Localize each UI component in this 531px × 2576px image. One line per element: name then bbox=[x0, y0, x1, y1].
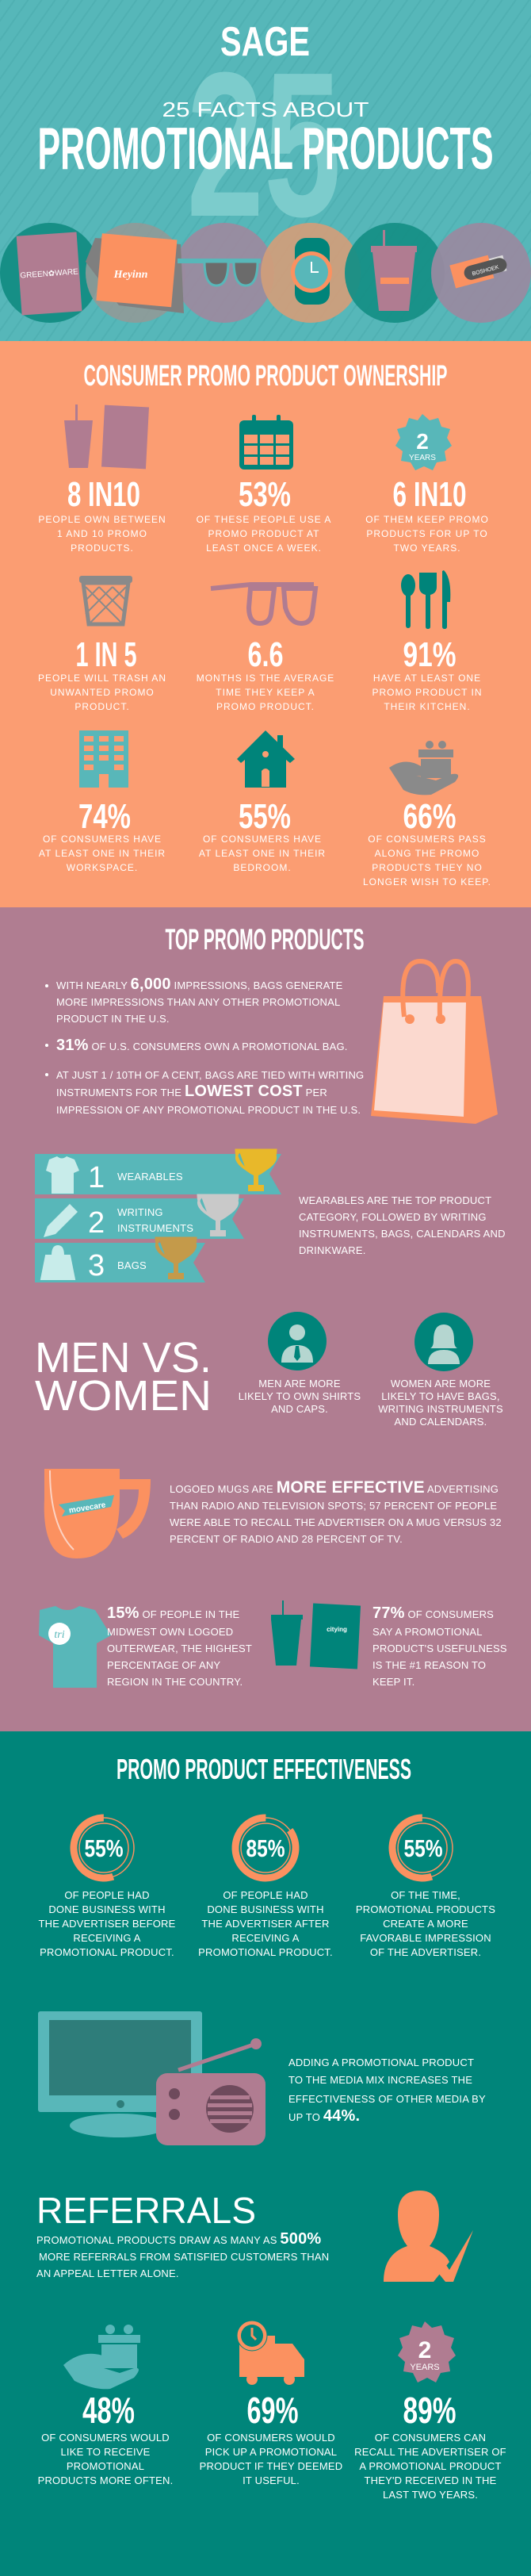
ribbon ranking bbox=[35, 1150, 281, 1282]
icon: usb drive: BOSHOEK bbox=[472, 265, 500, 277]
product circles bbox=[0, 223, 531, 323]
header panel bbox=[0, 0, 531, 341]
stat: 74%: OF CONSUMERS HAVE bbox=[43, 834, 162, 845]
icon: messenger bag: Heyinn bbox=[113, 269, 148, 281]
text: 77% usefulness: IS THE #1 REASON TO bbox=[372, 1659, 486, 1671]
text: 15% midwest: 15% bbox=[107, 1604, 139, 1622]
subtitle: 25 FACTS ABOUT bbox=[162, 98, 369, 121]
text: media mix 44%: ADDING A PROMOTIONAL PRODUCT bbox=[288, 2057, 474, 2068]
donut: 55% before bbox=[38, 1810, 176, 1958]
stat: 48%: LIKE TO RECEIVE bbox=[60, 2446, 151, 2458]
icon: t-shirt bbox=[39, 1606, 111, 1688]
stat: 91%: THEIR KITCHEN. bbox=[384, 701, 471, 712]
text: 15% midwest: OF PEOPLE IN THE bbox=[139, 1608, 239, 1620]
text: mugs more effective: LOGOED MUGS ARE bbox=[170, 1483, 277, 1495]
donut: 55% favorable: 55% bbox=[404, 1834, 442, 1862]
donut: 55% before: OF PEOPLE HAD bbox=[64, 1889, 150, 1901]
bullet list: AT JUST 1 / 10TH OF A CENT, BAGS ARE TIED WITH WRITING bbox=[56, 1069, 364, 1081]
panel: promo product effectiveness bbox=[0, 1731, 531, 2576]
bullet list: 6,000 IMPRESSIONS, BAGS GENERATE bbox=[131, 976, 343, 993]
text: men: MEN ARE MORE bbox=[258, 1378, 341, 1390]
stat: 6 in 10 bbox=[365, 414, 489, 554]
icon: watch bbox=[291, 238, 332, 305]
stat: 89%: OF CONSUMERS CAN bbox=[375, 2432, 486, 2444]
text: wearables top category: CATEGORY, FOLLOWED BY WRITING bbox=[299, 1211, 487, 1223]
icon: tv and radio bbox=[38, 2011, 266, 2145]
text: 77% usefulness: PRODUCT'S USEFULNESS bbox=[372, 1643, 507, 1654]
stat: 66% bbox=[363, 741, 491, 887]
bullet list: WITH NEARLY bbox=[56, 979, 131, 991]
ribbon 2: writing instruments: WRITING bbox=[117, 1206, 163, 1218]
text: wearables top category: DRINKWARE. bbox=[299, 1244, 366, 1256]
stat: 1 in 5: UNWANTED PROMO bbox=[50, 687, 155, 698]
icon: person with check bbox=[384, 2191, 473, 2282]
stat: 89%: LAST TWO YEARS. bbox=[383, 2489, 478, 2501]
stat: 6 in 10: 6 IN10 bbox=[393, 475, 466, 514]
stat: 48%: PRODUCTS MORE OFTEN. bbox=[38, 2474, 173, 2486]
stat: 53% bbox=[197, 415, 331, 554]
stat: 66%: OF CONSUMERS PASS bbox=[368, 834, 487, 845]
text: mugs more effective: MORE EFFECTIVE ADVERTISING bbox=[277, 1478, 499, 1497]
bullet list: MORE IMPRESSIONS THAN ANY OTHER PROMOTIONAL bbox=[56, 996, 340, 1008]
donut: 85% after: THE ADVERTISER AFTER bbox=[201, 1918, 330, 1930]
donut: 55% before: THE ADVERTISER BEFORE bbox=[38, 1918, 176, 1930]
ribbon 1: wearables: 1 bbox=[88, 1161, 105, 1194]
stat: 48%: 48% bbox=[82, 2390, 135, 2431]
stat: 8 in 10: 8 IN10 bbox=[67, 475, 140, 514]
bullet list: INSTRUMENTS FOR THE bbox=[56, 1087, 185, 1098]
donut: 55% favorable: PROMOTIONAL PRODUCTS bbox=[356, 1903, 495, 1915]
ribbon 3: bags bbox=[35, 1238, 205, 1282]
bullet list bbox=[45, 976, 364, 1116]
icon: sunglasses bbox=[178, 259, 261, 286]
stat: 48%: PROMOTIONAL bbox=[67, 2460, 144, 2472]
ribbon 2: writing instruments: INSTRUMENTS bbox=[117, 1222, 193, 1234]
icon: woman bbox=[414, 1313, 473, 1371]
stat: 8 in 10: PEOPLE OWN BETWEEN bbox=[38, 514, 166, 525]
stat: 91%: HAVE AT LEAST ONE bbox=[373, 673, 481, 684]
icon: messenger bag bbox=[86, 233, 184, 313]
stat: 89%: RECALL THE ADVERTISER OF bbox=[354, 2446, 506, 2458]
text: men: AND CAPS. bbox=[271, 1403, 328, 1415]
icon: notebook bbox=[17, 232, 82, 316]
text: media mix 44%: 44%. bbox=[323, 2107, 360, 2125]
icon: usb drive bbox=[449, 251, 510, 289]
stat: 66%: ALONG THE PROMO bbox=[375, 848, 479, 859]
text: 77% usefulness: OF CONSUMERS bbox=[405, 1608, 494, 1620]
text: referrals 500%: AN APPEAL LETTER ALONE. bbox=[36, 2267, 179, 2279]
icon: man bbox=[268, 1312, 327, 1370]
panel: consumer promo product ownership bbox=[0, 341, 531, 907]
stat: 8 in 10 bbox=[38, 404, 166, 554]
stat: 1 in 5: 1 IN 5 bbox=[76, 635, 136, 674]
text: 15% midwest: PERCENTAGE OF ANY bbox=[107, 1659, 220, 1671]
stat: 48%: OF CONSUMERS WOULD bbox=[41, 2432, 170, 2444]
text: referrals 500%: PROMOTIONAL PRODUCTS DRAW AS MANY AS bbox=[36, 2234, 280, 2246]
stat: 48% bbox=[38, 2325, 173, 2486]
stat: 8 in 10: 1 AND 10 PROMO bbox=[57, 528, 147, 539]
icon: shopping bag bbox=[371, 961, 498, 1124]
text: women: WOMEN ARE MORE bbox=[391, 1378, 491, 1390]
icon: tumbler and notebook bbox=[271, 1600, 361, 1669]
stat: 8 in 10: PRODUCTS. bbox=[71, 542, 134, 554]
text: mugs more effective: THAN RADIO AND TELEVISION SPOTS; 57 PERCENT OF PEOPLE bbox=[170, 1500, 497, 1512]
stat: 6.6: MONTHS IS THE AVERAGE bbox=[197, 673, 334, 684]
ribbon 2: writing instruments bbox=[35, 1195, 244, 1240]
stat: 6.6 bbox=[197, 585, 334, 712]
heading: men vs women: WOMEN bbox=[35, 1372, 212, 1420]
text: 77% usefulness: SAY A PROMOTIONAL bbox=[372, 1626, 483, 1638]
bullet list: LOWEST COST PER bbox=[185, 1083, 327, 1100]
stat: 1 in 5: PRODUCT. bbox=[74, 701, 130, 712]
stat: 53%: OF THESE PEOPLE USE A bbox=[197, 514, 331, 525]
bullet list: OF U.S. CONSUMERS OWN A PROMOTIONAL BAG. bbox=[89, 1041, 348, 1052]
ribbon 3: bags: 3 bbox=[88, 1249, 105, 1282]
text: 15% midwest: REGION IN THE COUNTRY. bbox=[107, 1676, 243, 1688]
stat: 91%: 91% bbox=[403, 635, 457, 674]
stat: 89% bbox=[354, 2321, 506, 2501]
donut: 85% after bbox=[198, 1806, 333, 1958]
stat: 6 in 10: PRODUCTS FOR UP TO bbox=[366, 528, 488, 539]
donut: 55% favorable: OF THE TIME, bbox=[391, 1889, 460, 1901]
donut: 55% favorable: FAVORABLE IMPRESSION bbox=[360, 1932, 491, 1944]
ribbon 2: writing instruments: 2 bbox=[88, 1206, 105, 1240]
text: women: LIKELY TO HAVE BAGS, bbox=[381, 1390, 500, 1402]
stat: 69%: PICK UP A PROMOTIONAL bbox=[205, 2446, 337, 2458]
stat: 6 in 10: YEARS bbox=[409, 454, 436, 462]
text: women: WRITING INSTRUMENTS bbox=[378, 1403, 503, 1415]
donut: 55% before: DONE BUSINESS WITH bbox=[48, 1903, 166, 1915]
ribbon 1: wearables: WEARABLES bbox=[117, 1171, 183, 1183]
text: women: AND CALENDARS. bbox=[395, 1416, 487, 1428]
stat: 6 in 10: TWO YEARS. bbox=[393, 542, 461, 554]
text: media mix 44%: UP TO bbox=[288, 2111, 323, 2123]
stat: 89%: 2 bbox=[418, 2337, 431, 2363]
stat: 69%: IT USEFUL. bbox=[243, 2474, 300, 2486]
stat: 69%: PRODUCT IF THEY DEEMED bbox=[200, 2460, 342, 2472]
donut: 85% after: PROMOTIONAL PRODUCT. bbox=[198, 1946, 333, 1958]
text: mugs more effective: WERE ABLE TO RECALL THE ADVERTISER ON A MUG VERSUS 32 bbox=[170, 1516, 502, 1528]
heading: referrals: REFERRALS bbox=[36, 2190, 256, 2231]
stat: 89%: 89% bbox=[403, 2390, 457, 2431]
stat: 1 in 5: PEOPLE WILL TRASH AN bbox=[38, 673, 166, 684]
stat: 69%: OF CONSUMERS WOULD bbox=[207, 2432, 335, 2444]
stat: 66%: LONGER WISH TO KEEP. bbox=[363, 876, 491, 887]
text: wearables top category: INSTRUMENTS, BAGS, CALENDARS AND bbox=[299, 1228, 506, 1240]
stat: 53%: 53% bbox=[239, 475, 291, 514]
stat: 74%: AT LEAST ONE IN THEIR bbox=[39, 848, 166, 859]
text: 15% midwest: MIDWEST OWN LOGOED bbox=[107, 1626, 233, 1638]
donut: 55% favorable: OF THE ADVERTISER. bbox=[370, 1946, 481, 1958]
stat: 91% bbox=[372, 570, 483, 712]
donut: 85% after: 85% bbox=[246, 1834, 285, 1862]
donut: 85% after: DONE BUSINESS WITH bbox=[207, 1903, 324, 1915]
icon: notebook: GREEN✿WARE bbox=[20, 267, 79, 281]
logo: SAGE: SAGE bbox=[220, 19, 310, 65]
icon: mug: movecare bbox=[68, 1501, 107, 1516]
stat: 89%: A PROMOTIONAL PRODUCT bbox=[359, 2460, 502, 2472]
donut: 55% before: 55% bbox=[84, 1834, 124, 1862]
text: mugs more effective: PERCENT OF RADIO AND 28 PERCENT OF TV. bbox=[170, 1533, 403, 1545]
text: referrals 500%: MORE REFERRALS FROM SATISFIED CUSTOMERS THAN bbox=[39, 2251, 329, 2263]
stat: 66%: 66% bbox=[403, 797, 457, 836]
icon: mug bbox=[44, 1469, 151, 1558]
stat: 69% bbox=[200, 2321, 342, 2486]
stat: 74%: 74% bbox=[78, 797, 131, 836]
icon: tumbler and notebook: citying bbox=[327, 1626, 347, 1633]
stat: 89%: YEARS bbox=[410, 2363, 440, 2372]
stat: 55%: AT LEAST ONE IN THEIR bbox=[199, 848, 326, 859]
stat: 74%: WORKSPACE. bbox=[67, 862, 138, 873]
donut: 55% before: PROMOTIONAL PRODUCT. bbox=[40, 1946, 174, 1958]
ribbon 3: bags: BAGS bbox=[117, 1259, 147, 1271]
text: 77% usefulness: 77% bbox=[372, 1604, 405, 1622]
stat: 6 in 10: 2 bbox=[416, 429, 429, 454]
ghost number 25: 25 bbox=[187, 30, 341, 260]
text: men: LIKELY TO OWN SHIRTS bbox=[239, 1390, 361, 1402]
icon: t-shirt: tri bbox=[54, 1629, 65, 1641]
stat: 55%: BEDROOM. bbox=[233, 862, 292, 873]
bullet list: 31% bbox=[56, 1037, 89, 1054]
text: media mix 44%: EFFECTIVENESS OF OTHER MEDIA BY bbox=[288, 2093, 486, 2105]
stat: 55% bbox=[199, 730, 326, 873]
stat: 6 in 10: OF THEM KEEP PROMO bbox=[365, 514, 489, 525]
text: referrals 500%: 500% bbox=[280, 2230, 321, 2248]
donut: 55% favorable: CREATE A MORE bbox=[383, 1918, 468, 1930]
ribbon 1: wearables bbox=[35, 1150, 281, 1194]
text: 15% midwest: OUTERWEAR, THE HIGHEST bbox=[107, 1643, 252, 1654]
text: 77% usefulness: KEEP IT. bbox=[372, 1676, 414, 1688]
stat: 74% bbox=[39, 730, 166, 873]
stat: 69%: 69% bbox=[247, 2390, 298, 2431]
bullet list: PRODUCT IN THE U.S. bbox=[56, 1013, 170, 1025]
donut: 85% after: RECEIVING A bbox=[231, 1932, 300, 1944]
stat: 1 in 5 bbox=[38, 576, 166, 712]
stat: 55%: 55% bbox=[239, 797, 291, 836]
stat: 66%: PRODUCTS THEY NO bbox=[372, 862, 483, 873]
stat: 89%: THEY'D RECEIVED IN THE bbox=[364, 2474, 497, 2486]
heading: men vs women: MEN VS. bbox=[35, 1334, 212, 1382]
panel: top promo products bbox=[0, 907, 531, 1732]
stat: 6.6: PROMO PRODUCT. bbox=[216, 701, 315, 712]
stat: 53%: PROMO PRODUCT AT bbox=[208, 528, 319, 539]
text: media mix 44%: TO THE MEDIA MIX INCREASES THE bbox=[288, 2074, 472, 2086]
donut: 85% after: OF PEOPLE HAD bbox=[223, 1889, 308, 1901]
icon: tumbler bbox=[371, 230, 417, 311]
stat: 91%: PROMO PRODUCT IN bbox=[372, 687, 483, 698]
stat: 6.6: TIME THEY KEEP A bbox=[216, 687, 315, 698]
donut: 55% before: RECEIVING A bbox=[73, 1932, 141, 1944]
donut: 55% favorable bbox=[356, 1810, 495, 1958]
bullet list: IMPRESSION OF ANY PROMOTIONAL PRODUCT IN THE U.S. bbox=[56, 1104, 361, 1116]
stat: 53%: LEAST ONCE A WEEK. bbox=[206, 542, 322, 554]
stat: 55%: OF CONSUMERS HAVE bbox=[203, 834, 322, 845]
text: wearables top category: WEARABLES ARE THE TOP PRODUCT bbox=[299, 1194, 491, 1206]
heading: TOP PROMO PRODUCTS bbox=[165, 923, 365, 956]
stat: 6.6: 6.6 bbox=[247, 635, 284, 674]
